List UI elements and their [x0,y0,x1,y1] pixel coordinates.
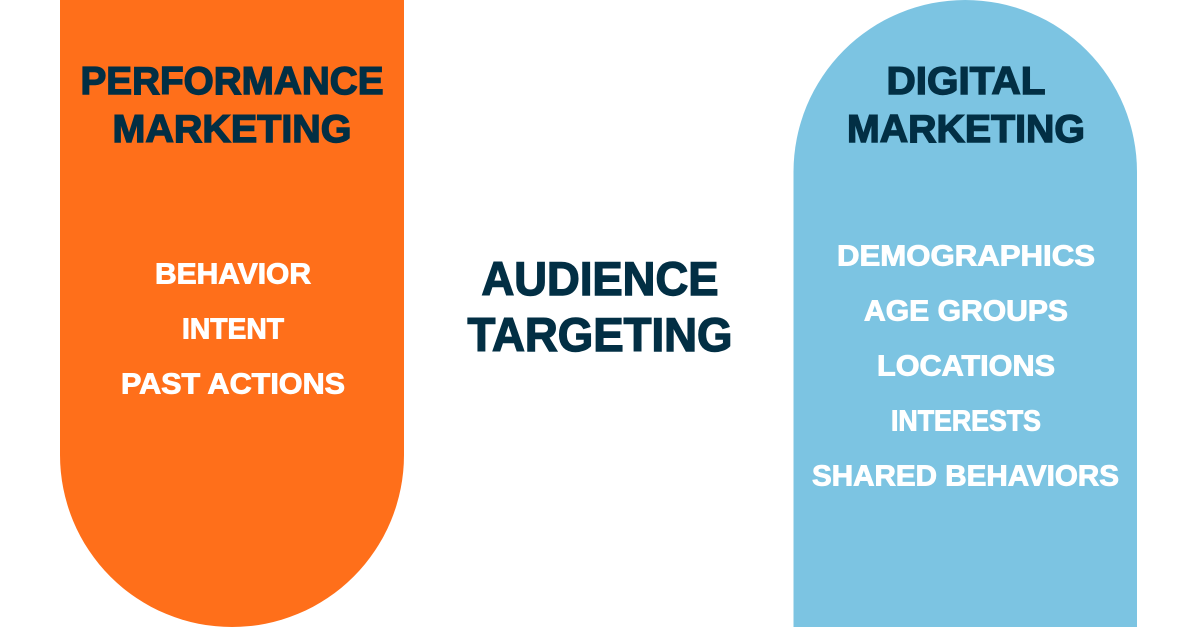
list: digital marketing targeting: INTERESTS [891,406,1041,438]
heading: digital marketing: MARKETING [847,108,1085,151]
heading: performance marketing: PERFORMANCE [80,60,384,103]
panel: performance marketing [60,0,404,627]
center heading: audience targeting: AUDIENCE [482,252,718,305]
orange panel shape [60,0,404,627]
list: digital marketing targeting: AGE GROUPS [864,296,1068,328]
heading: performance marketing: MARKETING [112,108,352,151]
center heading: audience targeting [468,252,732,361]
list: digital marketing targeting: DEMOGRAPHICS [837,240,1095,272]
list: performance marketing targeting: INTENT [182,314,284,346]
heading: digital marketing [847,60,1085,151]
list: performance marketing targeting [121,258,345,400]
heading: digital marketing: DIGITAL [886,60,1046,103]
heading: performance marketing [80,60,384,151]
panel: digital marketing [794,0,1137,627]
center heading: audience targeting: TARGETING [468,308,732,361]
list: digital marketing targeting [812,240,1119,492]
list: digital marketing targeting: LOCATIONS [877,350,1055,382]
list: performance marketing targeting: BEHAVIOR [155,258,311,290]
list: performance marketing targeting: PAST ACTIONS [121,368,345,400]
list: digital marketing targeting: SHARED BEHAVIORS [812,460,1119,492]
blue panel shape [794,0,1137,627]
